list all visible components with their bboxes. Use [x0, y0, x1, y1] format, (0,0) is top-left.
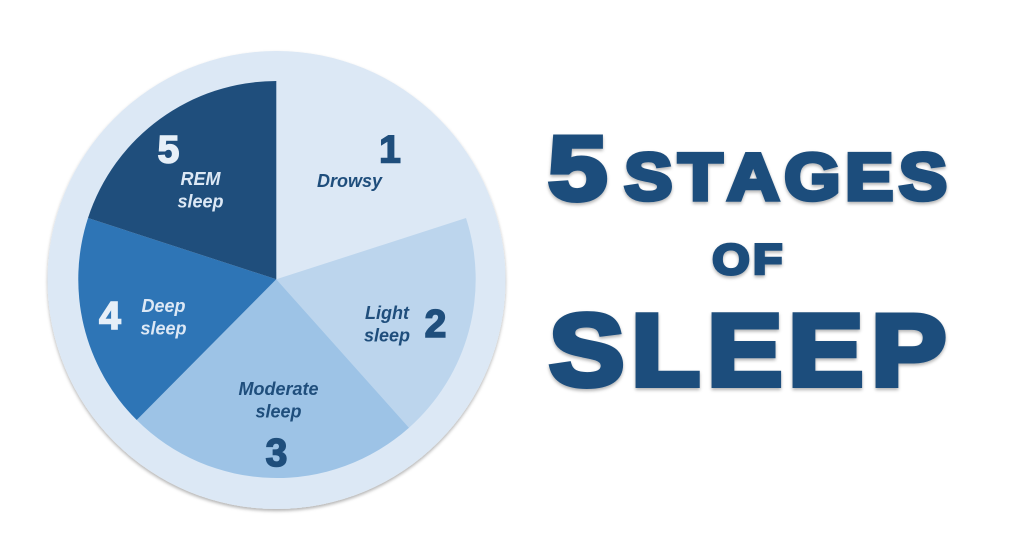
title numeral 5: 5 [548, 117, 607, 219]
slice 5: REM sleep [88, 81, 276, 279]
title word SLEEP: SLEEP [549, 293, 946, 407]
slice 2: light sleep [276, 218, 476, 428]
slice 1: drowsy [276, 81, 466, 279]
title: 5 stages of sleep [548, 117, 947, 407]
label: REM sleep: REM [180, 169, 220, 189]
label: Light sleep: sleep [364, 326, 410, 346]
label: Drowsy: Drowsy [317, 171, 383, 191]
number 1: 1 [379, 128, 401, 172]
title word STAGES: STAGES [624, 140, 947, 214]
label: Light sleep: Light [365, 303, 409, 323]
slice 3: moderate sleep [137, 279, 409, 478]
label: Moderate sleep: Moderate [238, 379, 319, 399]
label: Deep sleep: Deep [141, 296, 186, 316]
outer disc [48, 51, 506, 509]
number 3: 3 [266, 432, 287, 475]
pie chart: sleep stages [48, 51, 506, 509]
number 5: 5 [158, 128, 179, 172]
slice 4: deep sleep [78, 218, 276, 420]
number 2: 2 [425, 303, 446, 346]
title word OF: OF [712, 235, 782, 283]
label: REM sleep: sleep [177, 192, 224, 212]
label: Moderate sleep: sleep [255, 402, 302, 422]
number 4: 4 [99, 295, 121, 338]
label: Deep sleep: sleep [140, 318, 187, 338]
